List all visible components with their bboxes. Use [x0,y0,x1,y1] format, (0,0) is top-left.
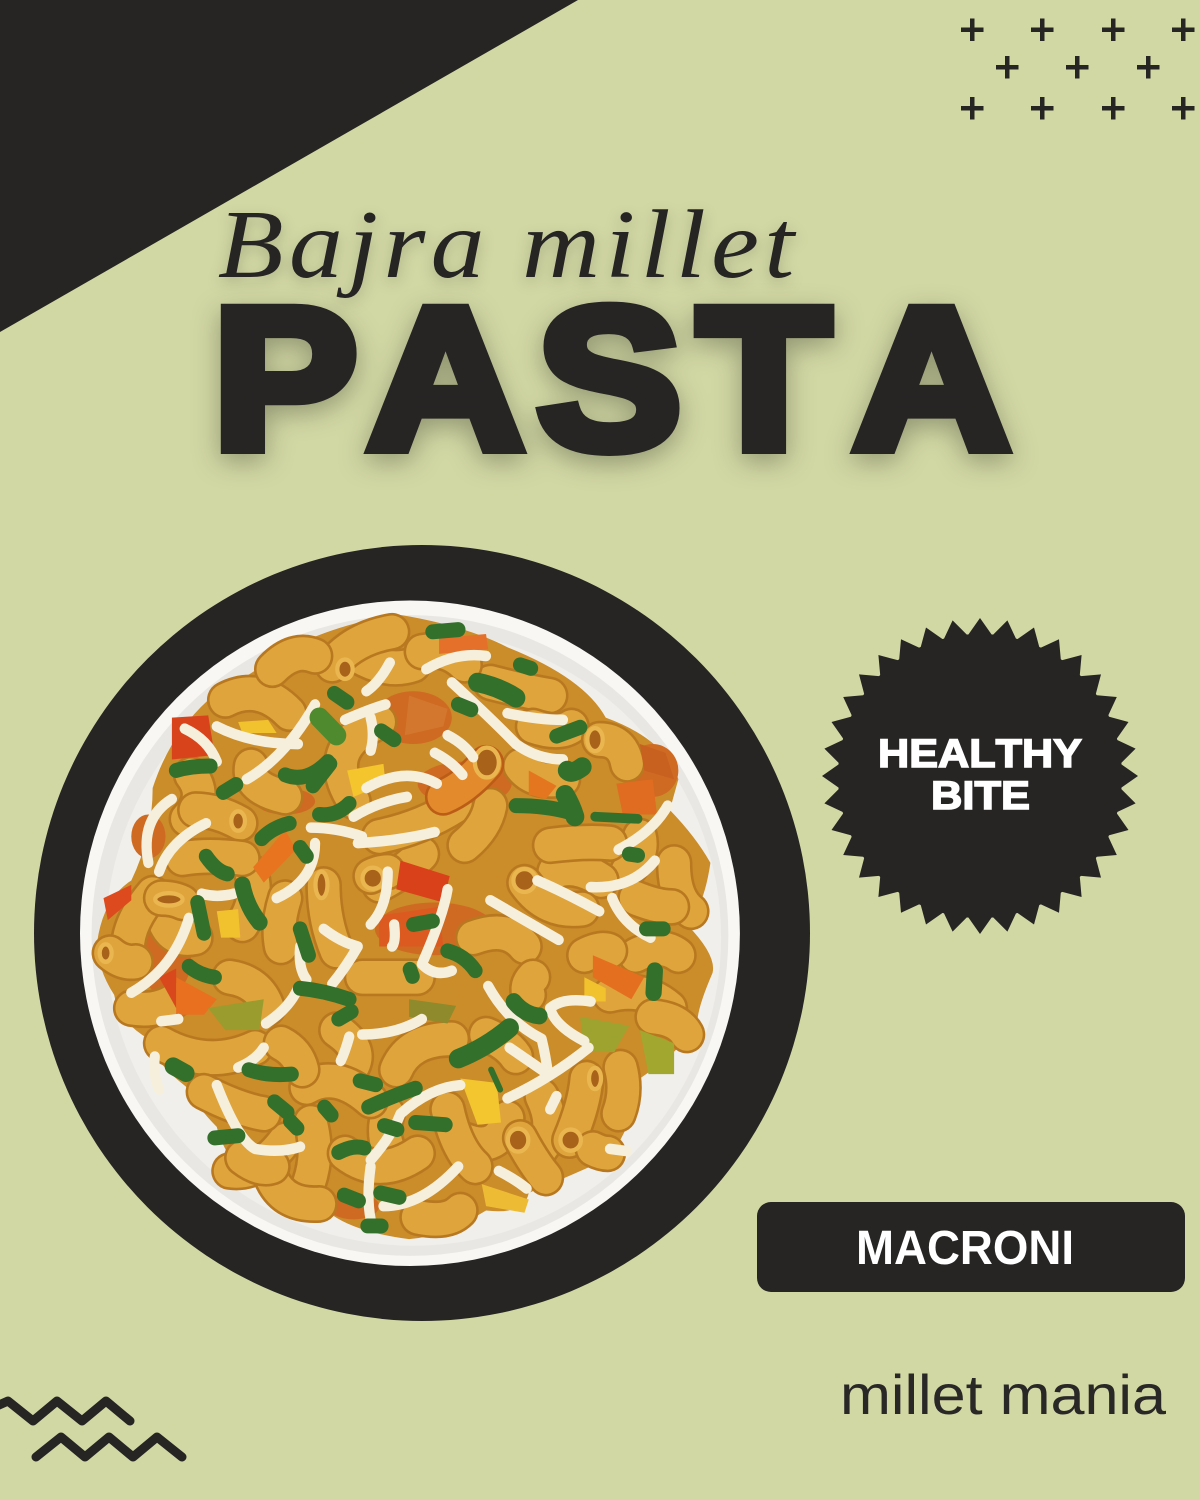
brand: millet mania: millet mania [840,1363,1167,1426]
zigzag decoration [0,1401,182,1457]
sauce patches [131,691,678,1219]
macaroni pieces [110,632,691,1219]
corner triangle [0,0,578,332]
tube openings [100,660,603,1152]
label: MACRONI [757,1202,1185,1292]
badge text: HEALTHY [878,732,1082,776]
shredded cheese [131,655,668,1219]
badge text: BITE [931,774,1030,818]
badge shape [822,618,1138,934]
black circle behind bowl [34,545,810,1321]
macaroni under-layer [165,656,678,1171]
food base [97,614,713,1239]
label: MACRONI: MACRONI [856,1222,1074,1275]
bowl of pasta [80,601,740,1266]
starburst badge [822,618,1138,934]
bowl [80,601,740,1266]
plus pattern [961,18,1194,120]
subtitle: Bajra millet: Bajra millet [218,190,797,299]
cilantro leaves [173,630,663,1226]
badge text [878,732,1082,818]
vegetables [104,634,674,1213]
title: PASTA: PASTA [213,267,1010,491]
